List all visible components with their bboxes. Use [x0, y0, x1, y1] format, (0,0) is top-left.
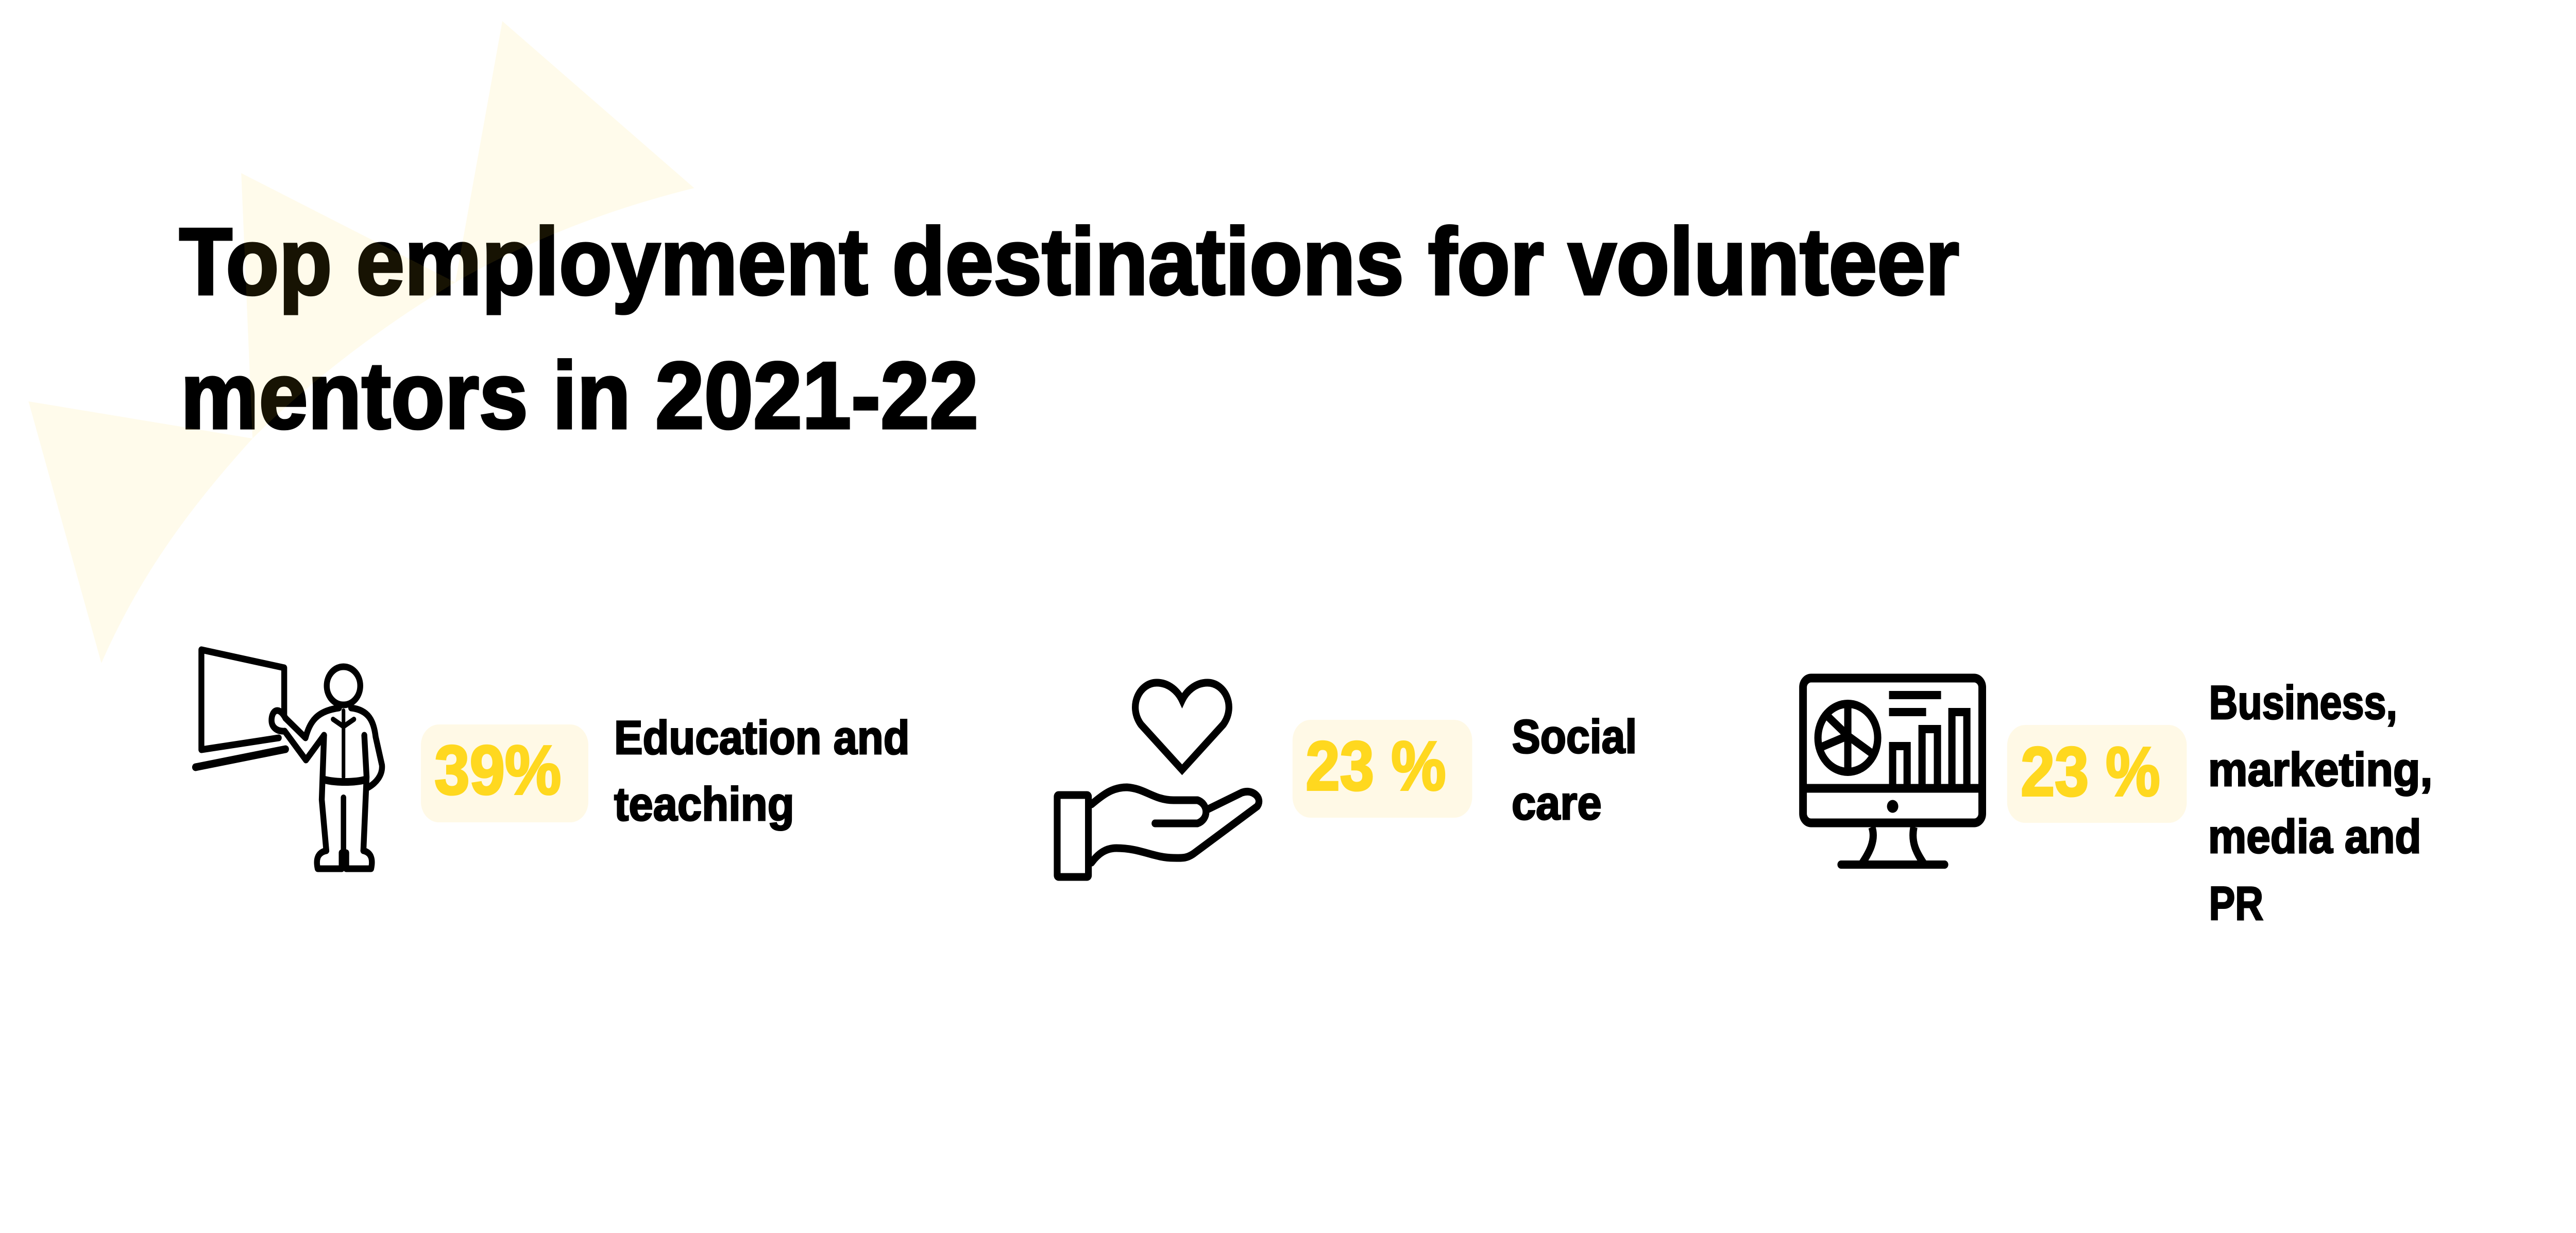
label: business, marketing, media and PR: Business, — [2209, 677, 2397, 729]
label: business, marketing, media and PR — [2208, 677, 2433, 930]
label: business, marketing, media and PR: PR — [2209, 877, 2263, 930]
background triangles — [28, 21, 694, 663]
badge: 23% social care: 23 % — [1306, 727, 1446, 805]
label: social care — [1512, 711, 1637, 830]
label: business, marketing, media and PR: media and — [2208, 810, 2421, 863]
label: education and teaching: Education and — [614, 712, 910, 764]
badge: 23% social care — [1293, 720, 1472, 818]
label: education and teaching: teaching — [614, 778, 794, 831]
icon: heart over open hand — [1057, 683, 1259, 877]
title: mentors in 2021-22 — [180, 342, 978, 448]
title — [179, 208, 1959, 448]
badge: 23% business — [2007, 725, 2187, 823]
badge: 39%: 39% — [434, 731, 561, 809]
label: social care: Social — [1512, 711, 1637, 763]
icon: teacher at a board — [195, 650, 382, 869]
label: business, marketing, media and PR: marketing, — [2208, 744, 2433, 796]
title: Top employment destinations for volunteer — [179, 208, 1959, 314]
icon: computer monitor with charts — [1803, 678, 1982, 865]
label: education and teaching — [614, 712, 910, 831]
badge: 23% business: 23 % — [2021, 733, 2160, 810]
label: social care: care — [1512, 777, 1602, 830]
badge: 39% — [421, 724, 588, 822]
